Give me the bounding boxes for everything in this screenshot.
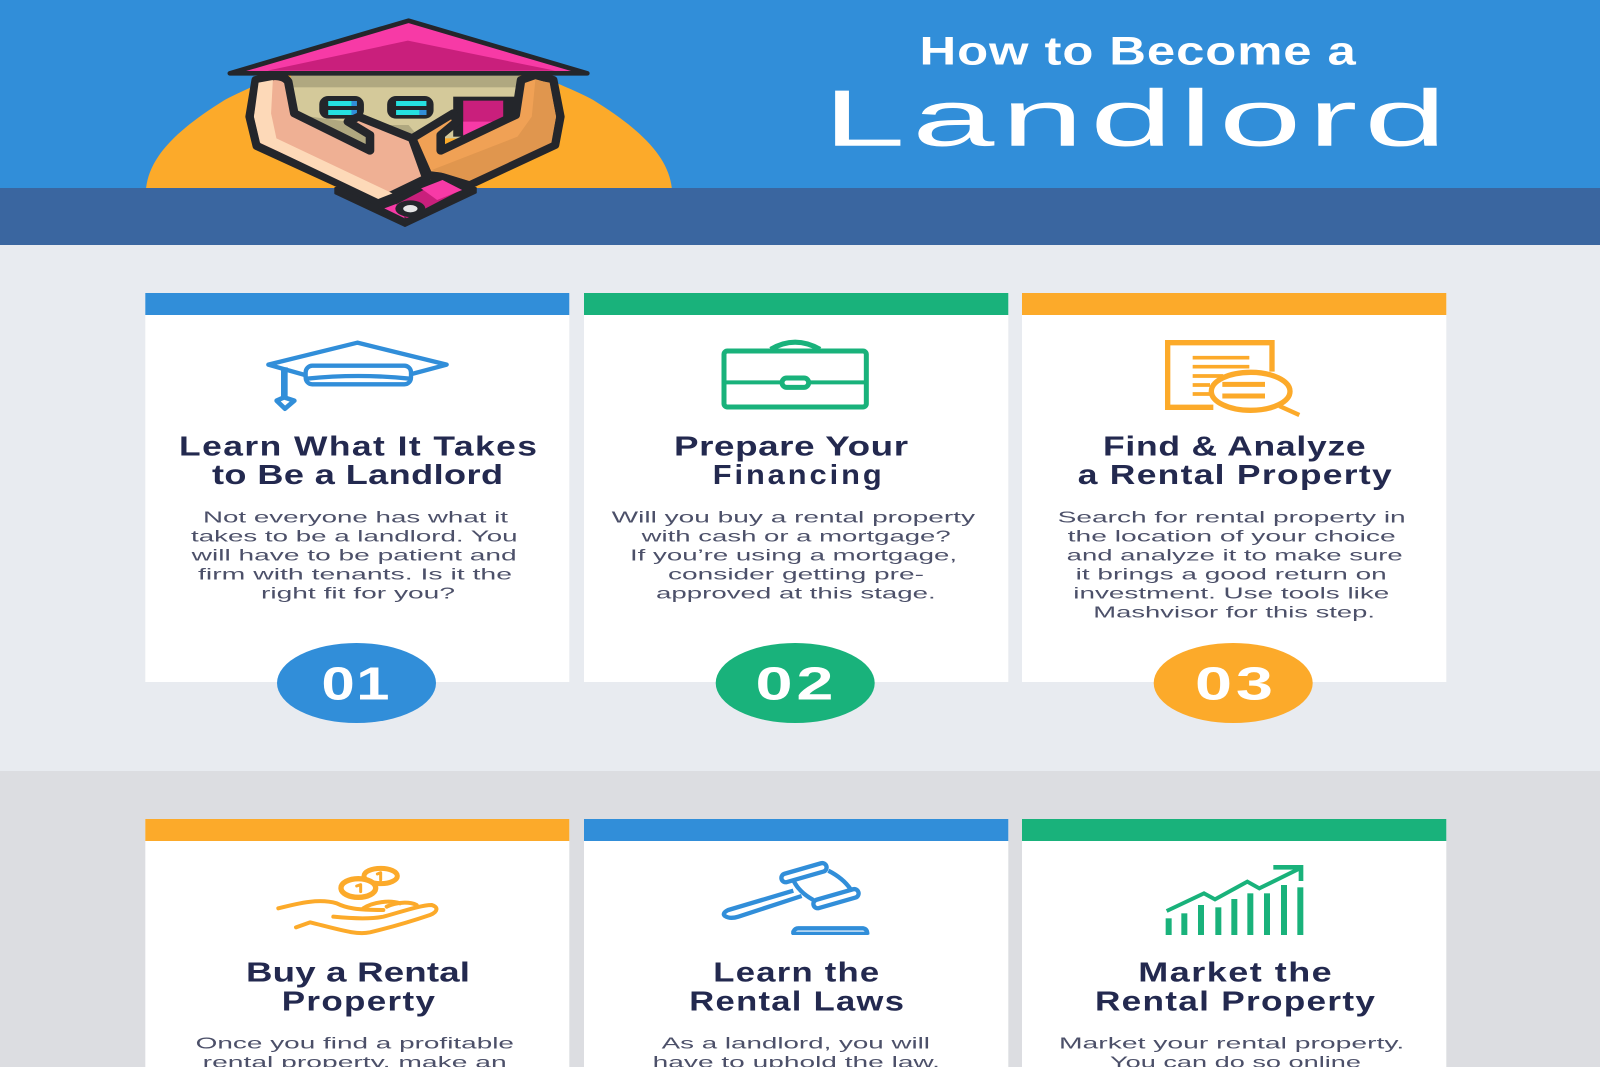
step 1 heading: Learn What It Takes: [179, 430, 537, 462]
step 6 heading: Rental Property: [1095, 985, 1375, 1017]
header banner: [0, 0, 1600, 245]
icon: rising bar chart with arrow: [1166, 867, 1303, 935]
step 1 heading: [179, 430, 537, 490]
step 4 heading: Buy a Rental: [246, 956, 470, 988]
step 3 body text: [1058, 509, 1406, 621]
panel: step 1 learn what it takes: [145, 293, 569, 723]
icon: graduation cap: [268, 343, 447, 409]
icon: document with magnifier: [1168, 343, 1299, 415]
step 1 number badge: 01: [322, 659, 389, 710]
step 1 body text: [190, 509, 518, 602]
step 1 body text: will have to be patient and: [190, 547, 517, 564]
step 4 heading: [246, 956, 470, 1017]
step 3 heading: Find & Analyze: [1103, 430, 1366, 462]
step 4 colour bar: [145, 819, 569, 841]
step 3 heading: a Rental Property: [1078, 459, 1392, 490]
step 5 heading: [689, 956, 904, 1017]
icon: gavel: [724, 862, 869, 934]
step 2 number badge: 02: [756, 659, 834, 710]
panel: step 4 buy a rental property: [145, 819, 569, 1067]
title line 2: Landlord: [823, 74, 1446, 163]
step 1 body text: Not everyone has what it: [203, 509, 509, 526]
step 3 body text: investment. Use tools like: [1073, 585, 1389, 602]
step 1 body text: takes to be a landlord. You: [191, 528, 518, 545]
panel: step 6 market the rental property: [1022, 819, 1446, 1067]
panel: step 2 prepare your financing: [584, 293, 1008, 723]
step 2 body text: consider getting pre-: [668, 566, 924, 583]
title line 1: How to Become a: [920, 28, 1356, 73]
step 1 heading: to Be a Landlord: [212, 459, 503, 490]
step 6 body text: Market your rental property.: [1059, 1035, 1404, 1052]
step 2 heading: [674, 430, 908, 491]
illustration: hands holding a house: [146, 21, 672, 226]
step 5 heading: Rental Laws: [689, 986, 904, 1017]
step 2 colour bar: [584, 293, 1008, 315]
icon: briefcase: [724, 342, 866, 407]
step 3 body text: and analyze it to make sure: [1067, 547, 1403, 564]
step 3 body text: it brings a good return on: [1076, 566, 1387, 583]
step 2 body text: If you’re using a mortgage,: [630, 547, 957, 564]
panel: step 3 find and analyze: [1022, 293, 1446, 723]
step 3 number badge: [1154, 643, 1313, 723]
step 1 body text: right fit for you?: [261, 585, 455, 602]
step 3 body text: the location of your choice: [1068, 528, 1396, 545]
step 6 body text: [1059, 1035, 1404, 1067]
step 3 heading: [1078, 430, 1392, 490]
step 2 body text: approved at this stage.: [656, 585, 936, 602]
step 5 heading: Learn the: [713, 956, 879, 988]
step 3 body text: Mashvisor for this step.: [1093, 604, 1375, 621]
step 4 heading: Property: [282, 985, 435, 1017]
step 2 heading: Prepare Your: [674, 430, 908, 462]
panel: step 5 learn the rental laws: [584, 819, 1008, 1067]
step 2 body text: [612, 509, 975, 602]
step 5 body text: As a landlord, you will: [662, 1035, 930, 1052]
step 6 heading: Market the: [1138, 957, 1332, 988]
step 5 body text: [653, 1035, 940, 1067]
step 2 heading: Financing: [713, 459, 882, 491]
step 3 colour bar: [1022, 293, 1446, 315]
step 1 number badge: [277, 643, 436, 723]
step 4 body text: Once you find a profitable: [196, 1035, 514, 1052]
step 1 colour bar: [145, 293, 569, 315]
step 3 body text: Search for rental property in: [1058, 509, 1406, 526]
step 2 number badge: [716, 643, 875, 723]
step 3 number badge: 03: [1195, 659, 1273, 710]
step 4 body text: [196, 1035, 514, 1067]
step 6 colour bar: [1022, 819, 1446, 841]
step 2 body text: with cash or a mortgage?: [640, 528, 951, 545]
step 6 heading: [1095, 957, 1375, 1017]
step 5 colour bar: [584, 819, 1008, 841]
step 2 body text: Will you buy a rental property: [612, 509, 975, 526]
title: how to become a landlord: [823, 28, 1446, 163]
icon: hand with coins: [278, 868, 436, 933]
step 1 body text: firm with tenants. Is it the: [198, 566, 512, 583]
